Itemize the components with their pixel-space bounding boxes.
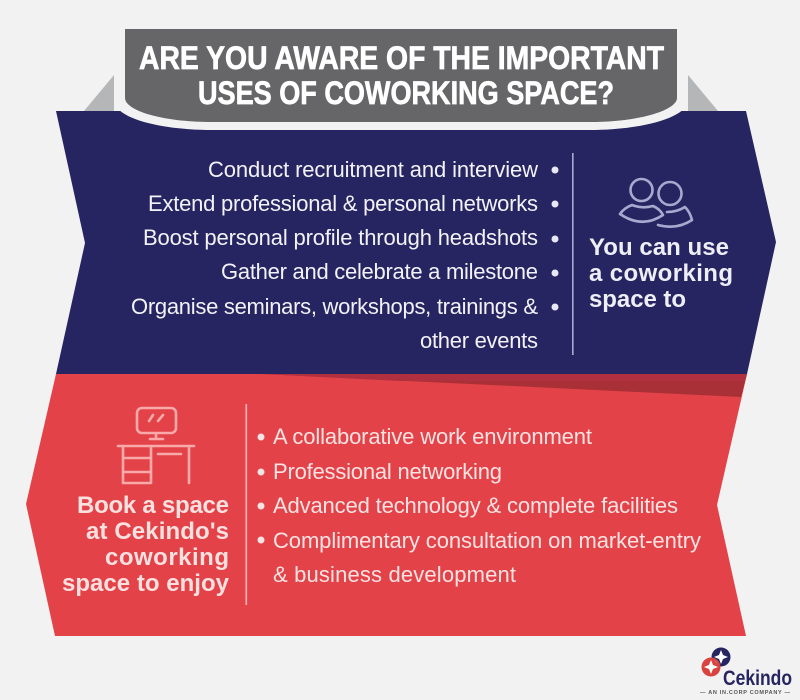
list: uses of coworking space: other events bbox=[420, 328, 538, 353]
panel: navy uses panel bbox=[56, 111, 776, 374]
list: uses of coworking space: Extend professional & personal networks bbox=[148, 191, 538, 216]
heading: you can use a coworking space to bbox=[589, 234, 733, 313]
heading: you can use a coworking space to: a coworking bbox=[589, 260, 733, 287]
heading: book a space at cekindo's coworking space to enjoy: coworking bbox=[105, 544, 229, 571]
logo: Cekindo: — AN IN.CORP COMPANY — bbox=[700, 690, 790, 696]
title banner bbox=[84, 29, 718, 130]
list: benefits: & business development bbox=[273, 562, 516, 587]
heading: book a space at cekindo's coworking space to enjoy: at Cekindo's bbox=[86, 518, 229, 545]
title text: ARE YOU AWARE OF THE IMPORTANT bbox=[139, 40, 664, 76]
heading: book a space at cekindo's coworking space to enjoy: Book a space bbox=[77, 492, 229, 519]
list: uses of coworking space: Gather and celebrate a milestone bbox=[221, 259, 538, 284]
list: uses of coworking space: Organise seminars, workshops, trainings & bbox=[131, 294, 538, 319]
heading: book a space at cekindo's coworking space to enjoy bbox=[62, 492, 230, 597]
title text bbox=[139, 40, 664, 111]
list: benefits: A collaborative work environment bbox=[273, 424, 592, 449]
list: benefits: Professional networking bbox=[273, 459, 502, 484]
heading: book a space at cekindo's coworking space to enjoy: space to enjoy bbox=[62, 570, 230, 597]
list: uses of coworking space bbox=[131, 157, 558, 353]
icon: desk with monitor bbox=[118, 408, 194, 483]
icon: two people bbox=[620, 179, 692, 227]
panel: red benefits panel bbox=[26, 374, 747, 636]
heading: you can use a coworking space to: You can use bbox=[589, 234, 729, 261]
title text: USES OF COWORKING SPACE? bbox=[198, 75, 614, 111]
logo: Cekindo bbox=[700, 648, 792, 696]
list: uses of coworking space: Boost personal profile through headshots bbox=[143, 225, 538, 250]
list: benefits: Advanced technology & complete facilities bbox=[273, 493, 678, 518]
list: benefits bbox=[258, 424, 701, 587]
list: benefits: Complimentary consultation on market-entry bbox=[273, 528, 701, 553]
heading: you can use a coworking space to: space to bbox=[589, 286, 686, 313]
list: uses of coworking space: Conduct recruitment and interview bbox=[208, 157, 538, 182]
